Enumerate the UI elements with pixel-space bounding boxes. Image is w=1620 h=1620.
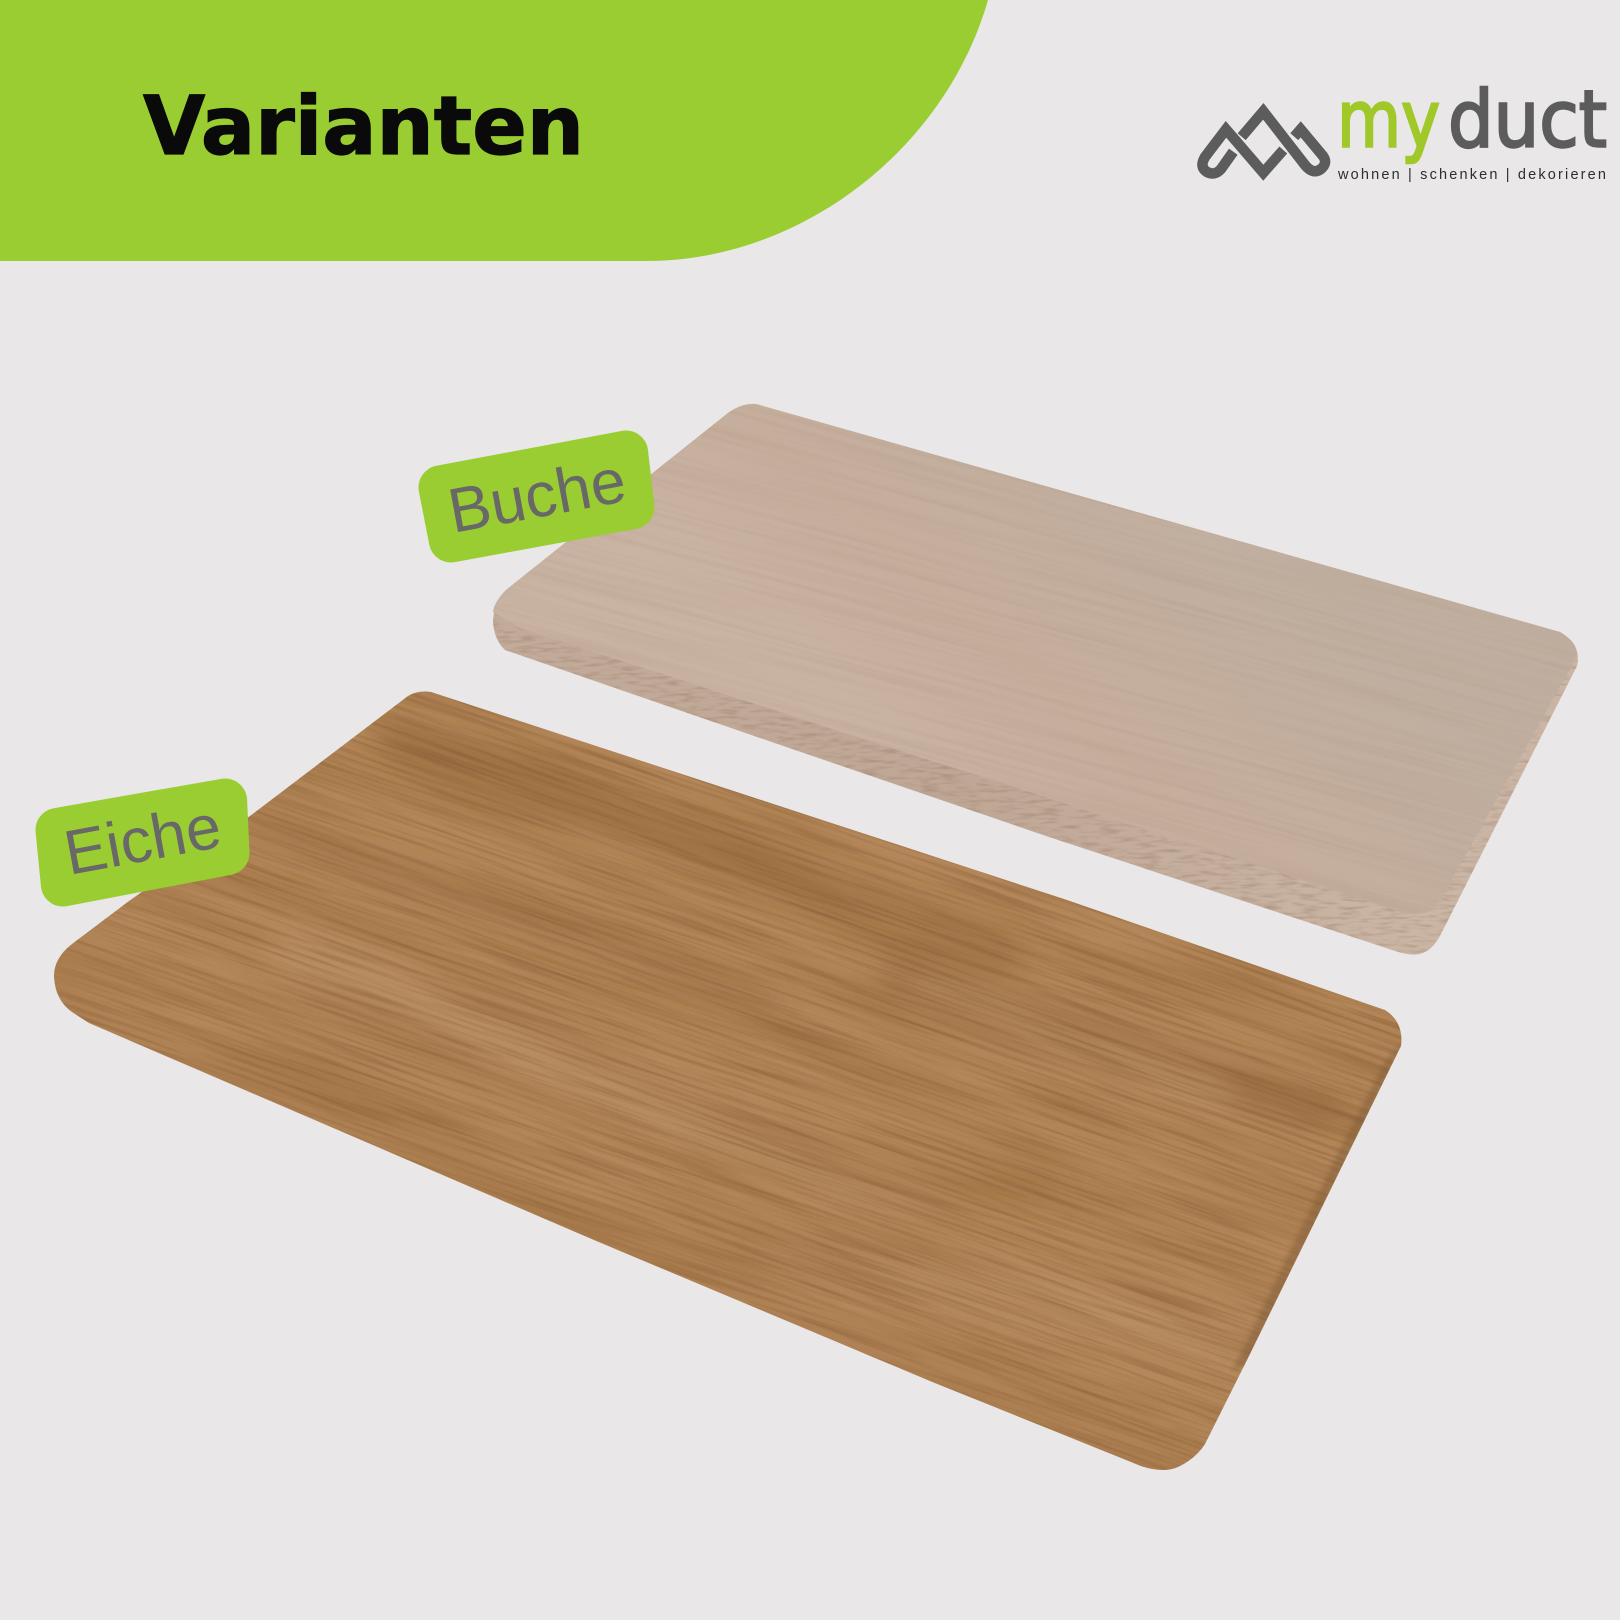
board top surface [493,404,1576,914]
board front edge [90,1024,1114,1455]
board wood surface [36,692,1402,1470]
board: Eiche (oak) [36,692,1402,1470]
board side face [493,404,1578,955]
logo: myduct [1202,76,1607,183]
board right edge [1232,1040,1404,1372]
logo wordmark: my: my [1337,76,1440,166]
board: Buche (beech) [493,404,1578,955]
label: Buche: Buche [443,445,631,547]
logo wordmark: duct: duct [1448,76,1607,166]
label: Eiche: Eiche [59,791,227,889]
logo tagline: wohnen | schenken | dekorieren [1337,167,1606,183]
title: Varianten [143,80,584,174]
header banner [0,0,988,261]
logo icon: mountains [1202,111,1325,173]
